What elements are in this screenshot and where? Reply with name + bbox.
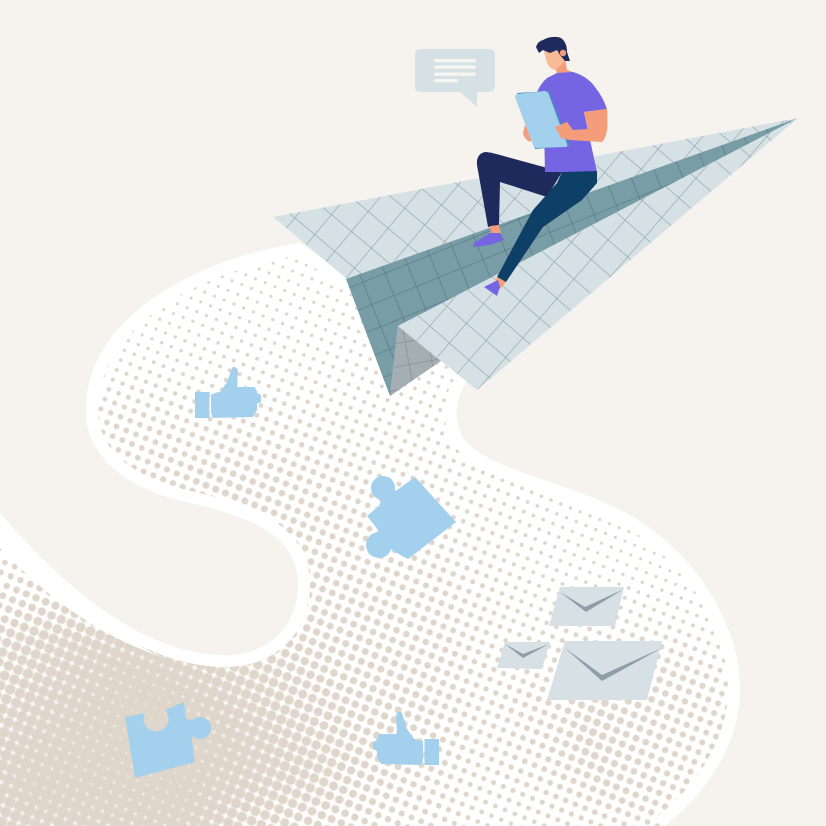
icon: puzzle piece centre xyxy=(366,476,456,559)
plane grey underside xyxy=(390,326,441,396)
white margin of S-shape xyxy=(0,243,740,826)
tablet edge xyxy=(517,91,570,149)
speech bubble xyxy=(415,49,495,107)
tablet xyxy=(515,91,567,148)
ear xyxy=(560,50,566,56)
icon: envelope top xyxy=(549,587,624,626)
plane upper wing xyxy=(273,118,798,279)
front leg xyxy=(497,171,597,282)
face xyxy=(543,46,565,70)
plane dark fold xyxy=(346,118,798,396)
halftone dot field xyxy=(0,249,740,826)
white band lower left xyxy=(0,513,170,660)
icon: envelope small xyxy=(497,642,550,669)
icon: puzzle piece lower left xyxy=(125,702,211,778)
white S-shaped path xyxy=(0,243,740,826)
arm xyxy=(555,109,608,142)
front shoe xyxy=(484,280,500,296)
back leg xyxy=(477,152,562,227)
back shoe xyxy=(473,233,504,247)
icon: thumbs up lower xyxy=(373,712,439,765)
hair xyxy=(536,37,570,61)
person reading on plane xyxy=(473,37,608,296)
shirt xyxy=(537,72,607,172)
icon: thumbs up upper xyxy=(195,367,261,418)
thumb over tablet xyxy=(555,122,573,140)
front ankle xyxy=(495,277,506,289)
icon: envelope large xyxy=(547,641,662,700)
left hand xyxy=(523,125,535,142)
plane lower wing xyxy=(398,118,798,390)
back ankle xyxy=(490,225,501,234)
paper plane xyxy=(273,118,798,396)
neck xyxy=(555,58,573,75)
